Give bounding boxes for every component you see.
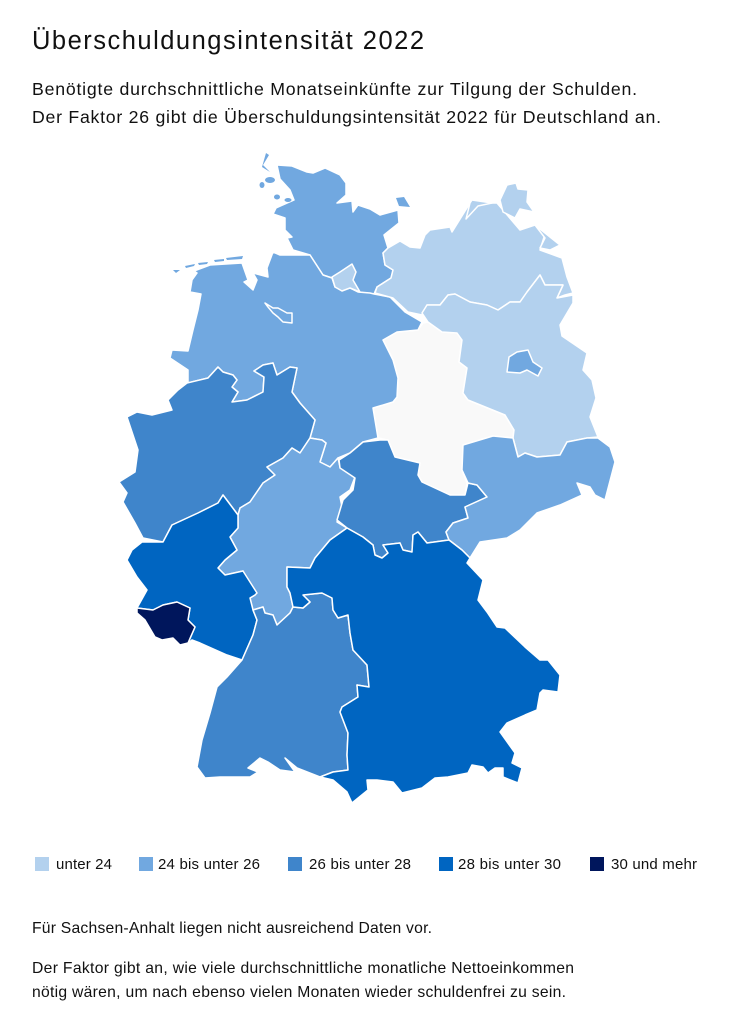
legend item: 24 bis unter 26: 24 bis unter 26: [158, 856, 260, 873]
footnote: factor explanation: nötig wären, um nach ebenso vielen Monaten wieder schuldenfrei zu sein.: [32, 984, 566, 1001]
region: Niedersachsen: [170, 252, 422, 467]
region: Nordrhein-Westfalen: [119, 363, 315, 542]
legend item: 26 bis unter 28: 26 bis unter 28: [309, 856, 411, 873]
map of Germany: [119, 153, 615, 803]
footnote: factor explanation: Der Faktor gibt an, wie viele durchschnittliche monatliche Nettoeinkommen: [32, 960, 574, 977]
region: Sachsen-Anhalt: [373, 322, 514, 495]
region: Saarland: [137, 602, 195, 645]
footnote: factor explanation: [32, 960, 574, 1001]
region: Hamburg: [332, 264, 360, 292]
subtitle: Benötigte durchschnittliche Monatseinkünfte zur Tilgung der Schulden.: [32, 79, 637, 99]
legend item: unter 24: unter 24: [56, 856, 112, 873]
region: Berlin: [507, 350, 542, 376]
region: Sachsen: [446, 436, 615, 558]
footnote: data note: Für Sachsen-Anhalt liegen nicht ausreichend Daten vor.: [32, 920, 432, 937]
region: Thüringen: [337, 440, 487, 558]
legend: [35, 856, 697, 873]
legend item: 28 bis unter 30: 28 bis unter 30: [458, 856, 561, 873]
title: Überschuldungsintensität 2022: [32, 27, 424, 55]
subtitle: [32, 79, 661, 127]
region: Baden-Württemberg: [197, 593, 369, 778]
legend item: 30 und mehr: 30 und mehr: [611, 856, 697, 873]
region: Bremen: [265, 303, 292, 323]
region: Bayern: [287, 528, 560, 803]
subtitle: Der Faktor 26 gibt die Überschuldungsintensität 2022 für Deutschland an.: [32, 107, 661, 127]
region: Rheinland-Pfalz: [127, 495, 257, 660]
region: Mecklenburg-Vorpommern: [375, 183, 573, 315]
region: Brandenburg: [422, 275, 598, 457]
region: Schleswig-Holstein: [260, 153, 410, 294]
region: Hessen: [218, 438, 355, 625]
